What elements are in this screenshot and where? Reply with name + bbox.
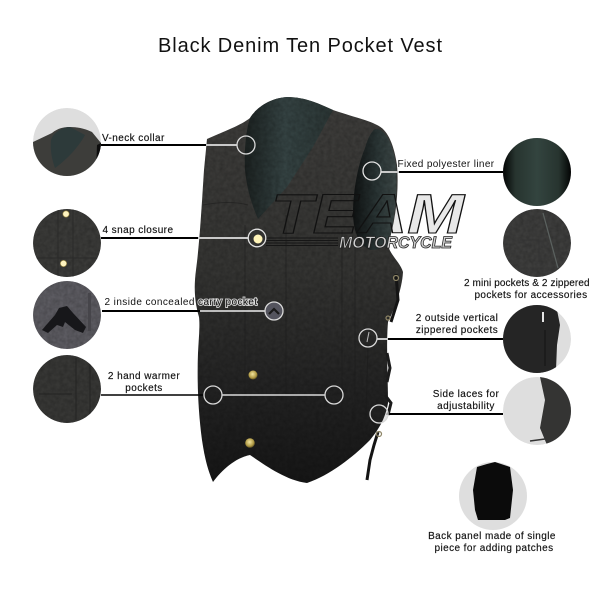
side laces xyxy=(367,274,398,480)
thumbnail: mini pockets xyxy=(503,209,571,277)
label: Back panel xyxy=(428,531,556,554)
callout line: hand warmer pockets xyxy=(101,394,325,396)
label: 2 outside vertical zippered pockets: 2 outside vertical xyxy=(416,313,498,324)
vest body xyxy=(195,97,403,483)
armhole liner xyxy=(353,129,397,250)
label: 2 hand warmer pockets: pockets xyxy=(125,383,163,394)
label: 2 hand warmer pockets: 2 hand warmer xyxy=(108,371,180,382)
callout line: V-neck collar xyxy=(101,144,237,146)
label: Fixed polyester liner: Fixed polyester liner xyxy=(398,159,495,170)
vest photo xyxy=(190,95,410,490)
icon: pistol xyxy=(42,306,86,333)
callout line: snap closure xyxy=(101,237,248,239)
logo fill showing on the white background: TEAM xyxy=(271,182,466,245)
inner liner at neck xyxy=(245,97,333,219)
label: mini and zippered pockets xyxy=(464,278,590,301)
label: 4 snap closure: 4 snap closure xyxy=(102,225,173,236)
label: Back panel: Back panel made of single xyxy=(428,531,556,542)
label: mini and zippered pockets: 2 mini pockets & 2 zippered xyxy=(464,278,590,289)
thumbnail: back panel xyxy=(459,462,527,530)
marker: right hand pocket xyxy=(325,386,343,404)
marker: left hand pocket xyxy=(204,386,222,404)
callout line: vertical zippered pockets xyxy=(377,338,503,340)
thumbnail: vertical zippered pockets xyxy=(503,305,571,373)
callout line: carry pocket xyxy=(102,310,265,312)
thumbnail: polyester liner xyxy=(503,138,571,206)
brand logo watermark: TEAM xyxy=(271,182,466,245)
eyelets xyxy=(394,276,398,280)
snaps xyxy=(254,234,262,244)
title: Black Denim Ten Pocket Vest xyxy=(158,35,442,57)
label: Side laces for adjustability: adjustability xyxy=(437,401,495,412)
marker: side laces xyxy=(370,405,388,423)
fabric texture and seams xyxy=(190,95,410,490)
thumbnail: concealed carry pocket xyxy=(33,281,101,349)
label: mini and zippered pockets: pockets for accessories xyxy=(474,290,588,301)
label: Side laces for adjustability xyxy=(433,389,499,412)
thumbnail: hand warmer pockets xyxy=(33,355,101,423)
brand logo watermark: MOTORCYCLE xyxy=(339,233,453,252)
label: Side laces for adjustability: Side laces for xyxy=(433,389,499,400)
callout line: side laces xyxy=(388,413,503,415)
callout line: polyester liner xyxy=(381,171,503,173)
marker: carry pocket xyxy=(265,302,283,320)
marker: polyester liner xyxy=(363,162,381,180)
thumbnail: snap closure xyxy=(33,209,101,277)
thumbnail: V-neck collar xyxy=(33,108,101,176)
label: Back panel: piece for adding patches xyxy=(434,543,554,554)
label: V-neck collar: V-neck collar xyxy=(102,133,165,144)
thumbnail: side laces xyxy=(503,377,571,445)
marker: snap closure xyxy=(248,229,266,247)
label: 2 outside vertical zippered pockets: zippered pockets xyxy=(416,325,498,336)
label: 2 hand warmer pockets xyxy=(108,371,180,394)
label: 2 outside vertical zippered pockets xyxy=(416,313,498,336)
label: 2 inside concealed carry pocket: 2 inside concealed carry pocket xyxy=(104,297,258,308)
marker: zippered pocket xyxy=(359,329,377,347)
marker: V-neck collar xyxy=(237,136,255,154)
